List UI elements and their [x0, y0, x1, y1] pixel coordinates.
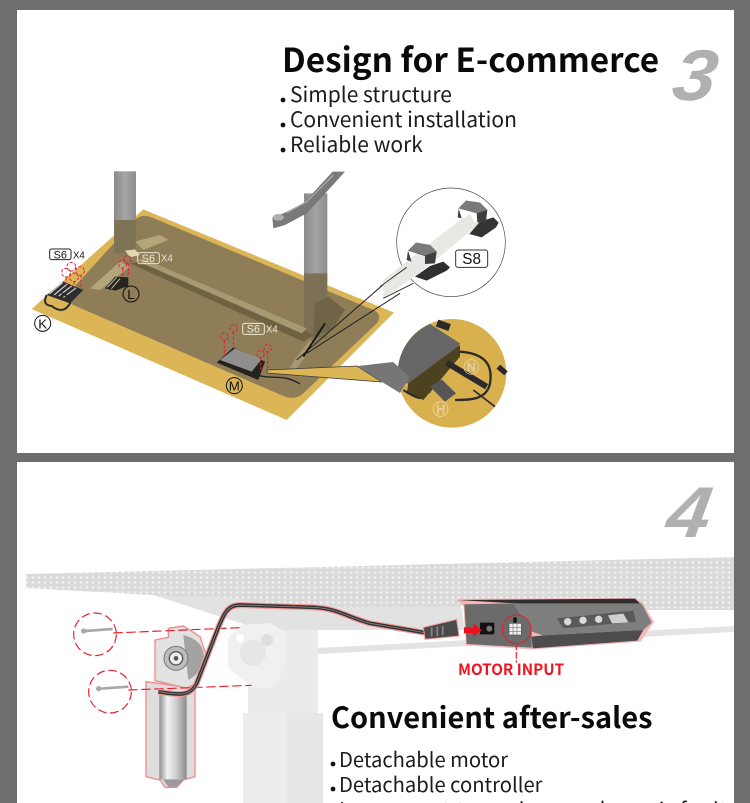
label: s6 x4 left: X4: [73, 250, 85, 261]
title: design for e-commerce: Design for E-commerce: [282, 33, 659, 82]
cable plug: [423, 619, 459, 639]
desk board: [32, 209, 394, 420]
panel: convenient after-sales: [17, 462, 734, 803]
crossbar: [318, 626, 734, 654]
label: s8: S8: [462, 251, 481, 268]
part l: [105, 277, 139, 302]
part m: control box: M: [229, 379, 240, 394]
translucent cable channel: [383, 220, 480, 298]
feature list: after-sales: Detachable motor: [339, 744, 508, 773]
crossbeam: [130, 262, 313, 342]
label: s6 x4 right: [243, 323, 278, 336]
label: motor input: MOTOR INPUT: [458, 658, 565, 680]
label: s6 x4 right: X4: [266, 325, 278, 336]
label: n: N: [467, 360, 476, 374]
red screw markers: [62, 256, 271, 370]
part m: control box: [217, 270, 400, 394]
controller body: [456, 598, 654, 649]
part l: L: [127, 287, 135, 302]
motor mount bracket: [228, 623, 287, 688]
section number 4: 4: [660, 472, 718, 552]
label: h: H: [436, 402, 445, 416]
callout: connector detail: [398, 319, 506, 428]
feature list: e-commerce: [281, 79, 517, 159]
feature list: after-sales: [331, 744, 739, 803]
lifting column: [243, 625, 323, 803]
perforated desktop: [26, 557, 734, 610]
mounting screws: [74, 613, 131, 713]
panel: design for e-commerce: [17, 10, 734, 453]
motor input port: [502, 615, 531, 644]
controller: [423, 598, 654, 663]
feature list: e-commerce: Simple structure: [290, 79, 452, 109]
callout: s8 clip detail: [380, 188, 505, 298]
assembly diagram: desk underside: [32, 171, 400, 420]
desk assembly illustration: [26, 557, 734, 803]
motor cylinder: [146, 682, 195, 787]
callout beam to connector detail: [267, 362, 410, 393]
red insertion arrow: [464, 623, 482, 637]
upper clip: [455, 201, 499, 237]
feature list: e-commerce: Convenient installation: [290, 104, 517, 134]
lower clip: [403, 243, 450, 281]
part k: cable clips: [35, 282, 83, 331]
motor: [74, 605, 425, 787]
part k: cable clips: K: [38, 316, 47, 331]
motor cable: [158, 605, 425, 694]
dashed alignment lines: [113, 628, 252, 690]
feature list: e-commerce: Reliable work: [290, 129, 423, 159]
label: s6 x4 right: S6: [247, 324, 260, 336]
label: s6 x4 centre: [138, 253, 173, 265]
left leg: [114, 171, 136, 253]
label: s6 x4 centre: X4: [161, 254, 173, 265]
label: s6 x4 centre: S6: [142, 253, 155, 265]
gearbox: [155, 626, 207, 688]
label: s6 x4 left: [50, 249, 85, 261]
feature list: after-sales: Detachable controller: [339, 769, 543, 798]
title: convenient after-sales: Convenient after-sales: [331, 695, 652, 737]
section number 3: 3: [668, 35, 724, 115]
desktop underside band: [153, 595, 465, 630]
label: s6 x4 left: S6: [54, 249, 67, 261]
right leg and foot: [272, 172, 345, 338]
